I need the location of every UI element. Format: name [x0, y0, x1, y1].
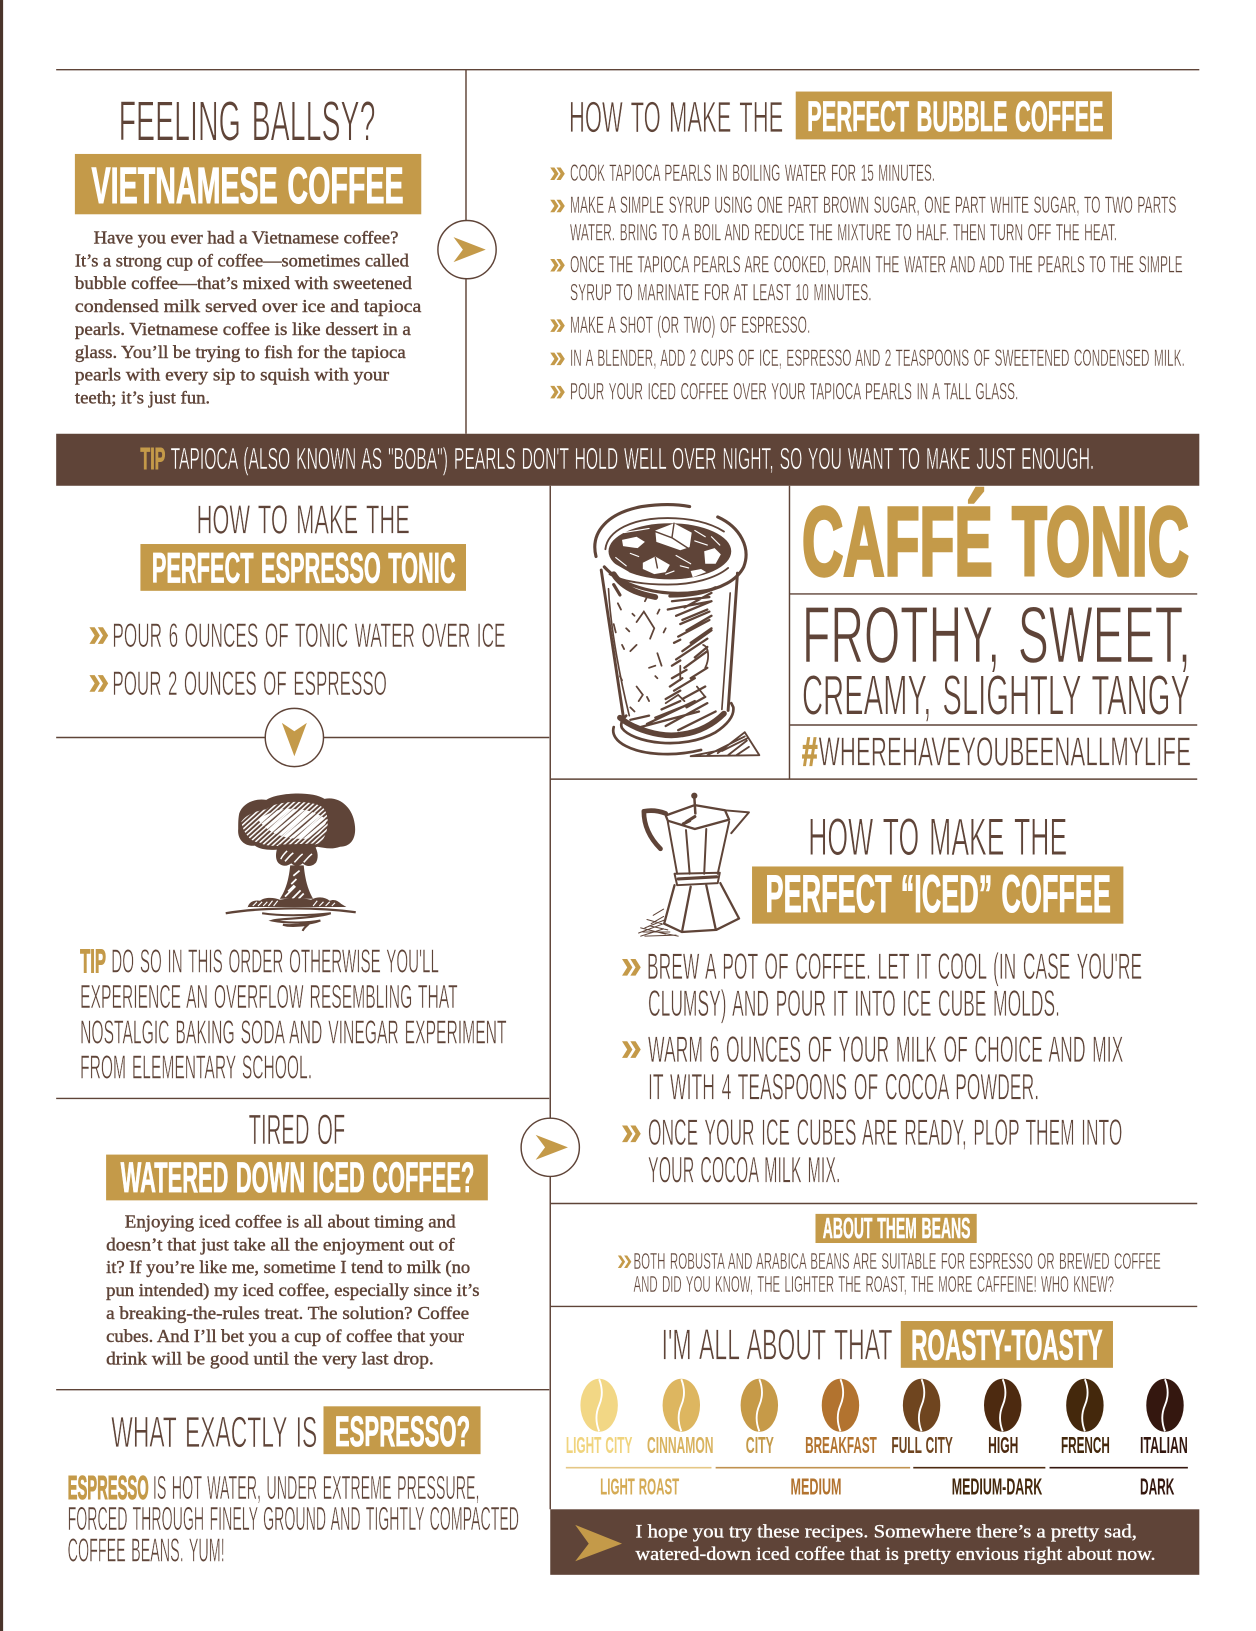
banner: Vietnamese coffee	[75, 154, 421, 214]
text block: Vietnamese coffee description: pearls with every sip to squish with your	[75, 365, 389, 385]
callout: tapioca tip bar	[56, 434, 1199, 486]
list: bubble coffee steps: SYRUP TO MARINATE FOR AT LEAST 10 MINUTES.	[570, 280, 872, 307]
banner: about them beans: ABOUT THEM BEANS	[823, 1213, 970, 1245]
banner: espresso	[323, 1406, 481, 1456]
text block: Vietnamese coffee description: Have you ever had a Vietnamese coffee?	[94, 227, 399, 247]
text block: Vietnamese coffee description: glass. You’ll be trying to fish for the tapioca	[75, 342, 406, 362]
text block: closing message	[636, 1521, 1156, 1565]
labels: roast levels: DARK	[1140, 1474, 1175, 1500]
text block: Vietnamese coffee description: condensed milk served over ice and tapioca	[75, 296, 421, 316]
banner: perfect espresso tonic	[140, 544, 466, 593]
banner: espresso: ESPRESSO?	[335, 1408, 470, 1456]
labels: roast names: BREAKFAST	[805, 1432, 877, 1458]
heading: feeling ballsy: FEELING BALLSY?	[119, 89, 375, 152]
text: IS HOT WATER, UNDER EXTREME PRESSURE,	[153, 1470, 480, 1507]
text block: espresso tonic tip	[80, 944, 507, 1087]
icon: mushroom cloud sketch	[226, 793, 356, 931]
text block: hashtag: #	[802, 729, 818, 775]
text block: espresso definition: ESPRESSO	[68, 1470, 149, 1507]
banner: perfect bubble coffee	[796, 92, 1112, 141]
text block: iced coffee description: doesn’t that just take all the enjoyment out of	[106, 1234, 455, 1254]
panel: watered down iced coffee: TIRED OF	[249, 1106, 345, 1154]
text block: Vietnamese coffee description: bubble coffee—that’s mixed with sweetened	[75, 273, 412, 293]
text block: bean facts	[618, 1248, 1161, 1297]
text block: closing message: I hope you try these recipes. Somewhere there’s a pretty sad,	[636, 1521, 1137, 1542]
text block: iced coffee description: cubes. And I’ll bet you a cup of coffee that your	[106, 1326, 464, 1346]
text block: espresso tonic tip: TIP	[80, 944, 106, 981]
panel: watered down iced coffee	[106, 1106, 488, 1369]
panel: perfect espresso tonic recipe	[89, 497, 506, 703]
icon: cinnamon bean	[663, 1379, 700, 1432]
panel: caffé tonic headline	[802, 486, 1191, 775]
panel: perfect iced coffee recipe	[622, 808, 1142, 1191]
banner: Vietnamese coffee: VIETNAMESE COFFEE	[92, 157, 404, 214]
icon: italian bean	[1146, 1379, 1184, 1432]
text block: iced coffee description: pun intended) my iced coffee, especially since it’s	[106, 1280, 480, 1300]
icon: breakfast bean	[822, 1379, 859, 1432]
icon: gold arrow	[575, 1525, 622, 1561]
banner: watered down iced coffee: WATERED DOWN ICED COFFEE?	[121, 1154, 474, 1202]
text block: Vietnamese coffee description: pearls. Vietnamese coffee is like dessert in a	[75, 319, 411, 339]
legend: roast level range lines	[566, 1467, 1188, 1469]
labels: roast names: CITY	[746, 1432, 774, 1458]
text block: closing message: watered-down iced coffee that is pretty envious right about now.	[636, 1544, 1156, 1565]
heading: how to make the: HOW TO MAKE THE	[197, 497, 410, 543]
list: bubble coffee steps	[550, 160, 1185, 405]
banner: watered down iced coffee	[106, 1154, 488, 1202]
list: iced coffee steps	[622, 945, 1142, 1191]
list: espresso tonic steps: POUR 2 OUNCES OF ESPRESSO	[112, 665, 387, 703]
text block: iced coffee description: drink will be good until the very last drop.	[106, 1349, 434, 1369]
list: espresso tonic steps: POUR 6 OUNCES OF TONIC WATER OVER ICE	[112, 617, 506, 655]
text block: espresso tonic tip: FROM ELEMENTARY SCHOOL.	[80, 1050, 312, 1087]
panel: perfect bubble coffee recipe	[550, 92, 1185, 405]
icon: high bean	[984, 1379, 1021, 1432]
panel: what exactly is espresso	[68, 1406, 519, 1569]
text block: espresso tonic tip: EXPERIENCE AN OVERFLOW RESEMBLING THAT	[80, 979, 458, 1016]
text block: espresso tonic tip: DO SO IN THIS ORDER OTHERWISE YOU'LL	[111, 944, 439, 981]
banner: perfect espresso tonic: PERFECT ESPRESSO TONIC	[152, 545, 456, 593]
labels: roast levels	[600, 1474, 1175, 1500]
panel: roast chart	[566, 1321, 1188, 1500]
list: iced coffee steps: YOUR COCOA MILK MIX.	[648, 1149, 840, 1191]
text block: iced coffee description	[106, 1211, 480, 1369]
labels: roast names: HIGH	[988, 1432, 1018, 1458]
heading: I'm all about that: I'M ALL ABOUT THAT	[662, 1321, 892, 1370]
labels: roast names: CINNAMON	[647, 1432, 714, 1458]
labels: roast names: FULL CITY	[891, 1432, 953, 1458]
labels: roast names	[566, 1432, 1188, 1458]
text block: iced coffee description: a breaking-the-rules treat. The solution? Coffee	[106, 1303, 469, 1323]
text block: espresso definition	[68, 1470, 519, 1569]
icon: city bean	[741, 1379, 778, 1432]
text: NOSTALGIC BAKING SODA AND VINEGAR EXPERIMENT	[80, 1014, 507, 1051]
icon: full city bean	[903, 1379, 940, 1432]
labels: roast names: ITALIAN	[1140, 1432, 1188, 1458]
labels: roast names: LIGHT CITY	[566, 1432, 632, 1458]
icon: circled arrow down	[265, 708, 323, 767]
icon: circled arrow right lower	[521, 1118, 579, 1176]
callout: tapioca tip bar: TIP	[140, 443, 165, 476]
labels: roast levels: MEDIUM-DARK	[952, 1474, 1043, 1500]
icon: light city bean	[580, 1379, 618, 1432]
banner: roasty-toasty	[901, 1321, 1113, 1370]
text block: espresso definition: COFFEE BEANS. YUM!	[68, 1532, 225, 1569]
icon: circled arrow right	[438, 221, 496, 279]
banner: about them beans	[815, 1213, 977, 1245]
callout: closing message bar	[550, 1509, 1199, 1575]
panel: Vietnamese coffee intro	[75, 89, 421, 408]
labels: roast levels: LIGHT ROAST	[600, 1474, 679, 1500]
icon: moka pot sketch	[639, 793, 749, 936]
heading: how to make the: HOW TO MAKE THE	[569, 93, 783, 142]
panel: about them beans	[618, 1213, 1161, 1297]
labels: roast names: FRENCH	[1061, 1432, 1110, 1458]
text block: iced coffee description: Enjoying iced coffee is all about timing and	[125, 1211, 456, 1231]
heading: what exactly is: WHAT EXACTLY IS	[111, 1408, 317, 1457]
text block: iced coffee description: it? If you’re like me, sometime I tend to milk (no	[106, 1257, 470, 1277]
text: FORCED THROUGH FINELY GROUND AND TIGHTLY COMPACTED	[68, 1501, 519, 1538]
labels: roast levels: MEDIUM	[791, 1474, 841, 1500]
text block: Vietnamese coffee description	[75, 227, 421, 408]
icon: iced coffee glass sketch	[595, 505, 759, 756]
icon: french bean	[1066, 1379, 1104, 1432]
text block: Vietnamese coffee description: teeth; it’s just fun.	[75, 388, 210, 408]
list: espresso tonic steps	[89, 617, 506, 703]
text block: Vietnamese coffee description: It’s a strong cup of coffee—sometimes called	[75, 250, 409, 270]
list: bubble coffee steps: MAKE A SHOT (OR TWO) OF ESPRESSO.	[570, 312, 810, 339]
